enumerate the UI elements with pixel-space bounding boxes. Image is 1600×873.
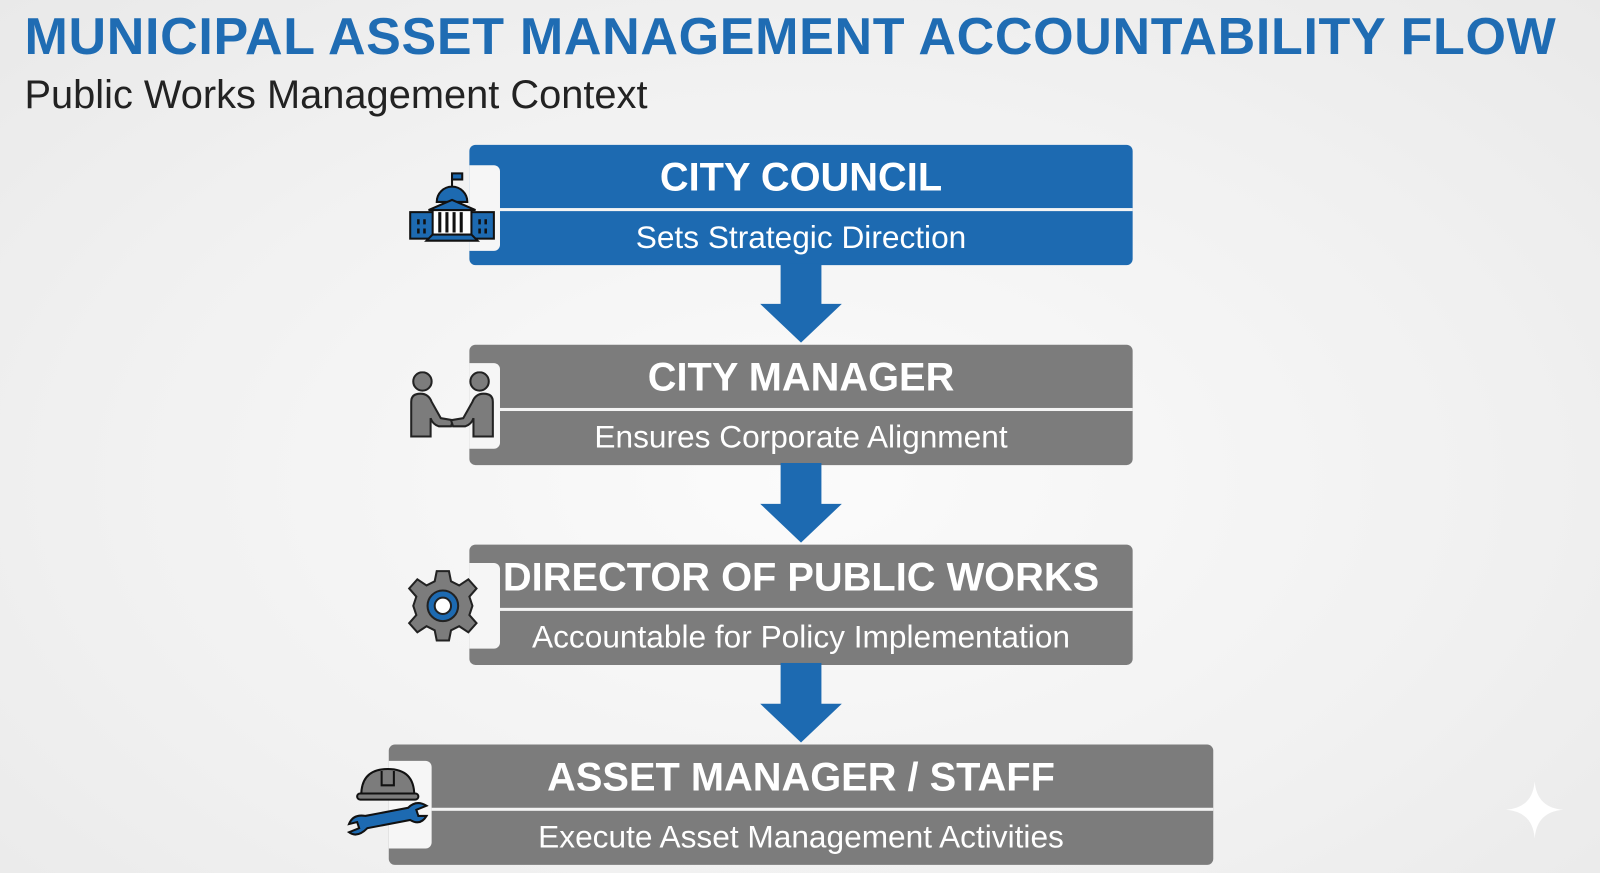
box: director — [469, 545, 1133, 665]
box: asset manager — [389, 745, 1213, 865]
icon: gear — [408, 570, 478, 642]
subtitle: Public Works Management Context — [24, 73, 648, 117]
box: city manager — [469, 345, 1133, 465]
icon: hardhat and wrench — [347, 768, 428, 836]
box: asset manager: Execute Asset Management Activities — [538, 819, 1064, 855]
box: director: Accountable for Policy Implementation — [532, 619, 1070, 655]
icon: capitol — [409, 172, 495, 242]
box: city manager: CITY MANAGER — [648, 356, 954, 400]
arrow 1 — [760, 265, 842, 343]
box: asset manager: ASSET MANAGER / STAFF — [547, 756, 1055, 800]
box: city manager: Ensures Corporate Alignment — [594, 419, 1008, 455]
box: director: DIRECTOR OF PUBLIC WORKS — [503, 556, 1099, 600]
box: city council: CITY COUNCIL — [660, 156, 942, 200]
title: MUNICIPAL ASSET MANAGEMENT ACCOUNTABILITY FLOW — [24, 7, 1556, 65]
box: city council — [469, 145, 1133, 265]
arrow 2 — [760, 463, 842, 543]
arrow 3 — [760, 663, 842, 742]
icon: handshake — [410, 371, 494, 438]
sparkle — [1507, 782, 1562, 838]
box: city council: Sets Strategic Direction — [636, 219, 966, 255]
